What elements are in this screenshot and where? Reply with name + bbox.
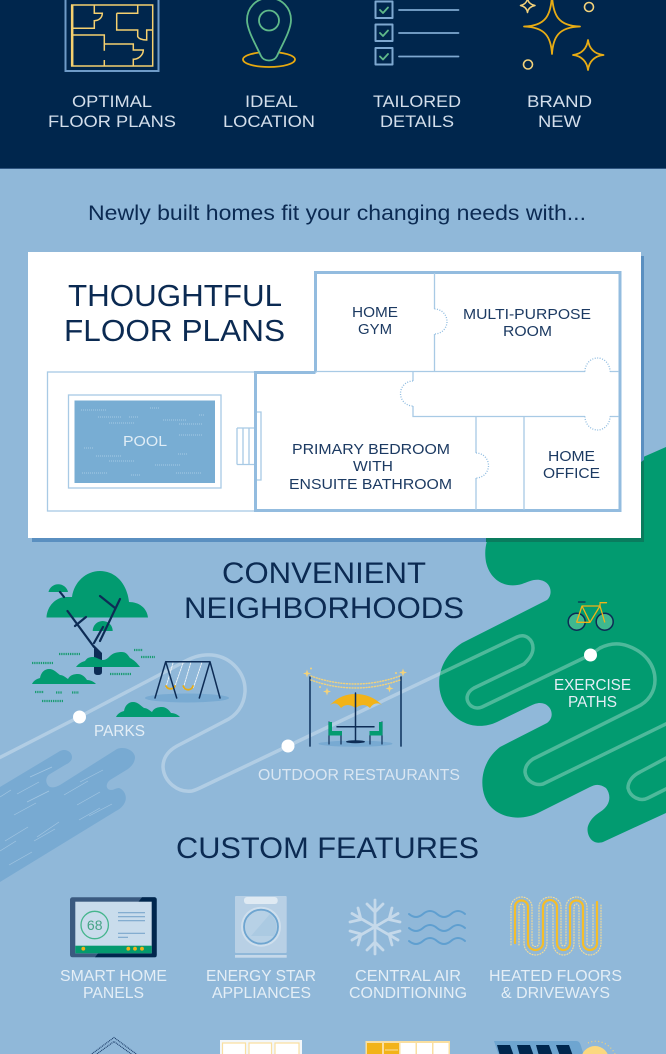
panel: thoughtful floor plans card <box>28 252 644 542</box>
room labels: ENSUITE BATHROOM <box>289 476 452 493</box>
label: brand new <box>527 93 592 131</box>
heading: convenient neighborhoods: CONVENIENT <box>222 557 426 590</box>
icon: floor plan <box>66 0 158 71</box>
label: optimal floor plans: OPTIMAL <box>72 93 152 111</box>
heading: convenient neighborhoods: NEIGHBORHOODS <box>184 592 464 625</box>
label: smart home panels: PANELS <box>83 985 144 1002</box>
icon: windows (cropped) <box>220 1040 302 1054</box>
label: energy star appliances: ENERGY STAR <box>206 968 316 985</box>
icon: energy star washer <box>235 896 287 958</box>
label: parks: PARKS <box>94 723 145 740</box>
room labels: HOME <box>548 448 595 465</box>
label: tailored details: TAILORED <box>373 93 461 111</box>
label: exercise paths: PATHS <box>568 694 617 711</box>
label: exercise paths <box>554 677 631 711</box>
icon: checklist <box>376 2 458 64</box>
trail path <box>0 636 666 799</box>
background: blue pond <box>0 748 135 882</box>
room labels: PRIMARY BEDROOM <box>292 441 450 458</box>
room labels: OFFICE <box>543 465 600 482</box>
room labels: WITH <box>353 458 393 475</box>
icon: swing set <box>145 662 229 702</box>
icon: smart home panel: 68 <box>87 917 103 933</box>
heading: thoughtful floor plans: FLOOR PLANS <box>64 313 285 348</box>
label: energy star appliances: APPLIANCES <box>212 985 311 1002</box>
floor plan drawing <box>48 272 620 511</box>
marker: parks <box>73 710 86 724</box>
label: smart home panels: SMART HOME <box>60 968 167 985</box>
icon: roof (cropped) <box>89 1038 139 1054</box>
icon: sparkles <box>520 0 604 70</box>
label: tailored details <box>373 93 461 131</box>
heading: thoughtful floor plans: THOUGHTFUL <box>68 278 282 313</box>
heading: convenient neighborhoods <box>184 557 464 625</box>
label: central air conditioning: CENTRAL AIR <box>355 968 461 985</box>
label: brand new: BRAND <box>527 93 592 111</box>
room labels: ROOM <box>503 323 552 340</box>
label: tailored details: DETAILS <box>380 113 454 131</box>
label: optimal floor plans <box>48 93 176 131</box>
label: heated floors and driveways: & DRIVEWAYS <box>501 985 610 1002</box>
icon: bicycle <box>568 602 613 630</box>
label: optimal floor plans: FLOOR PLANS <box>48 113 176 131</box>
label: central air conditioning: CONDITIONING <box>349 985 467 1002</box>
room labels: GYM <box>358 321 392 338</box>
pool water <box>74 400 215 483</box>
room labels: POOL <box>123 433 167 450</box>
label: energy star appliances <box>206 968 316 1002</box>
label: heated floors and driveways <box>489 968 622 1002</box>
label: smart home panels <box>60 968 167 1002</box>
icon: snowflake and air waves <box>350 900 465 954</box>
room labels: MULTI-PURPOSE <box>463 306 591 323</box>
label: ideal location <box>223 93 315 131</box>
label: central air conditioning <box>349 968 467 1002</box>
label: brand new: NEW <box>538 113 581 131</box>
heading: thoughtful floor plans <box>64 278 285 348</box>
marker: outdoor restaurants <box>282 740 294 752</box>
icon: smart home panel <box>70 897 157 957</box>
room labels <box>123 304 600 493</box>
label: ideal location: IDEAL <box>245 93 298 111</box>
label: ideal location: LOCATION <box>223 113 315 131</box>
intro sentence: Newly built homes fit your changing needs with... <box>88 202 586 225</box>
marker: exercise paths <box>584 648 597 662</box>
panel: navy benefits band <box>0 0 666 169</box>
icon: heated floors coil <box>511 897 601 955</box>
label: exercise paths: EXERCISE <box>554 677 631 694</box>
icon: park tree and bushes <box>32 571 180 717</box>
icon: sliding doors (cropped) <box>366 1041 450 1054</box>
icon: location pin <box>243 0 295 67</box>
room labels: HOME <box>352 304 398 321</box>
icon: solar panel and sun (cropped) <box>494 1041 615 1054</box>
icon: outdoor restaurant table <box>303 668 407 747</box>
background: green blob <box>439 447 666 843</box>
label: outdoor restaurants: OUTDOOR RESTAURANTS <box>258 767 460 784</box>
label: heated floors and driveways: HEATED FLOORS <box>489 968 622 985</box>
heading: custom features: CUSTOM FEATURES <box>176 832 479 865</box>
